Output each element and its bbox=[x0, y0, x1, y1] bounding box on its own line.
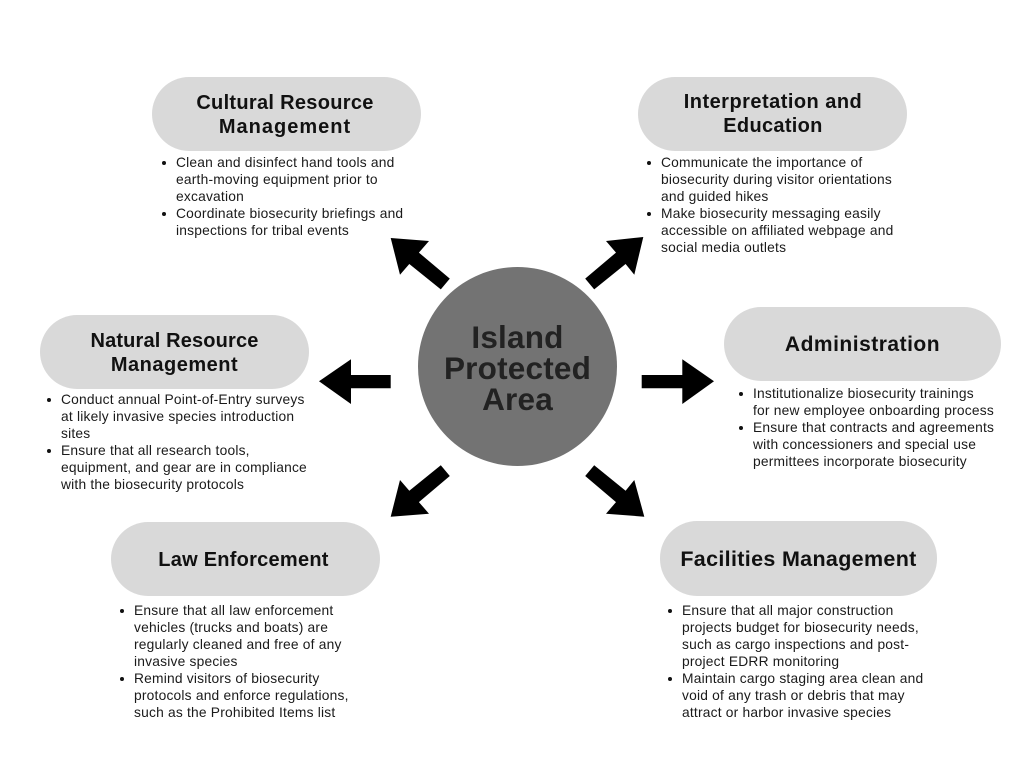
panel: Administration bbox=[724, 307, 1001, 469]
central circle: Island Protected Area bbox=[418, 267, 617, 466]
heading: Cultural Resource Management: Management bbox=[219, 116, 351, 138]
panel: Facilities Management bbox=[660, 521, 937, 720]
arrow: to Law Enforcement bbox=[391, 465, 450, 517]
heading: Facilities Management bbox=[660, 521, 937, 596]
panel: Law Enforcement bbox=[111, 522, 380, 720]
heading: Administration bbox=[724, 307, 1001, 381]
text: Natural Resource bullets: equipment, and gear are in compliance bbox=[61, 460, 307, 475]
central circle: Island Protected Area: Island bbox=[471, 319, 564, 355]
text: Facilities bullets: project EDRR monitoring bbox=[682, 654, 839, 669]
text: Law Enforcement bullets bbox=[120, 603, 349, 720]
central circle: Island Protected Area: Protected bbox=[444, 350, 591, 386]
panel: Interpretation and Education bbox=[638, 77, 907, 255]
text: Facilities bullets: Maintain cargo staging area clean and bbox=[682, 671, 923, 686]
text: Interpretation bullets: biosecurity during visitor orientations bbox=[661, 172, 892, 187]
arrow: to Cultural Resource Management bbox=[391, 238, 450, 289]
text: Law Enforcement bullets: Ensure that all law enforcement bbox=[134, 603, 333, 618]
heading: Facilities Management: Facilities Management bbox=[680, 547, 917, 571]
text: Facilities bullets bbox=[668, 603, 923, 720]
text: Administration bullets: for new employee onboarding process bbox=[753, 403, 994, 418]
text: Law Enforcement bullets: regularly cleaned and free of any bbox=[134, 637, 342, 652]
heading: Administration: Administration bbox=[785, 332, 940, 356]
text: Facilities bullets: such as cargo inspections and post- bbox=[682, 637, 909, 652]
text: Law Enforcement bullets: invasive species bbox=[134, 654, 238, 669]
heading: Cultural Resource Management: Cultural Resource bbox=[196, 92, 374, 114]
text: Administration bullets bbox=[739, 386, 994, 469]
heading: Cultural Resource Management bbox=[152, 77, 421, 151]
text: Cultural Resource bullets bbox=[162, 155, 403, 238]
text: Cultural Resource bullets: inspections for tribal events bbox=[176, 223, 349, 238]
heading: Interpretation and Education: Interpretation and bbox=[684, 91, 862, 113]
text: Natural Resource bullets: Ensure that all research tools, bbox=[61, 443, 250, 458]
text: Facilities bullets: attract or harbor invasive species bbox=[682, 705, 891, 720]
text: Natural Resource bullets: with the biosecurity protocols bbox=[61, 477, 244, 492]
text: Cultural Resource bullets: Coordinate biosecurity briefings and bbox=[176, 206, 403, 221]
text: Natural Resource bullets: sites bbox=[61, 426, 90, 441]
heading: Natural Resource Management: Natural Resource bbox=[90, 330, 258, 352]
text: Cultural Resource bullets: earth-moving equipment prior to bbox=[176, 172, 378, 187]
arrow: to Facilities Management bbox=[585, 465, 644, 517]
text: Interpretation bullets: accessible on affiliated webpage and bbox=[661, 223, 893, 238]
heading: Interpretation and Education: Education bbox=[723, 115, 823, 137]
arrow: to Natural Resource Management bbox=[319, 359, 391, 404]
text: Administration bullets: Institutionalize biosecurity trainings bbox=[753, 386, 974, 401]
arrow: to Administration bbox=[642, 359, 714, 404]
text: Facilities bullets: projects budget for biosecurity needs, bbox=[682, 620, 919, 635]
central circle: Island Protected Area: Area bbox=[482, 381, 553, 417]
heading: Natural Resource Management bbox=[40, 315, 309, 389]
arrow: to Interpretation and Education bbox=[585, 237, 643, 289]
text: Law Enforcement bullets: Remind visitors of biosecurity bbox=[134, 671, 319, 686]
text: Administration bullets: permittees incorporate biosecurity bbox=[753, 454, 967, 469]
heading: Interpretation and Education bbox=[638, 77, 907, 151]
text: Interpretation bullets bbox=[647, 155, 893, 255]
text: Administration bullets: with concessioners and special use bbox=[753, 437, 976, 452]
text: Cultural Resource bullets: excavation bbox=[176, 189, 244, 204]
text: Natural Resource bullets bbox=[47, 392, 307, 492]
text: Facilities bullets: Ensure that all major construction bbox=[682, 603, 894, 618]
heading: Law Enforcement bbox=[111, 522, 380, 596]
text: Interpretation bullets: social media outlets bbox=[661, 240, 786, 255]
text: Natural Resource bullets: at likely invasive species introduction bbox=[61, 409, 294, 424]
panel: Cultural Resource Management bbox=[152, 77, 421, 238]
text: Law Enforcement bullets: protocols and enforce regulations, bbox=[134, 688, 349, 703]
heading: Natural Resource Management: Management bbox=[111, 354, 238, 376]
panel: Natural Resource Management bbox=[40, 315, 309, 492]
text: Administration bullets: Ensure that contracts and agreements bbox=[753, 420, 994, 435]
heading: Law Enforcement: Law Enforcement bbox=[158, 548, 329, 570]
text: Interpretation bullets: Make biosecurity messaging easily bbox=[661, 206, 881, 221]
text: Cultural Resource bullets: Clean and disinfect hand tools and bbox=[176, 155, 395, 170]
text: Law Enforcement bullets: vehicles (trucks and boats) are bbox=[134, 620, 328, 635]
text: Interpretation bullets: Communicate the importance of bbox=[661, 155, 862, 170]
text: Natural Resource bullets: Conduct annual Point-of-Entry surveys bbox=[61, 392, 305, 407]
text: Facilities bullets: void of any trash or debris that may bbox=[682, 688, 905, 703]
text: Law Enforcement bullets: such as the Prohibited Items list bbox=[134, 705, 335, 720]
text: Interpretation bullets: and guided hikes bbox=[661, 189, 769, 204]
